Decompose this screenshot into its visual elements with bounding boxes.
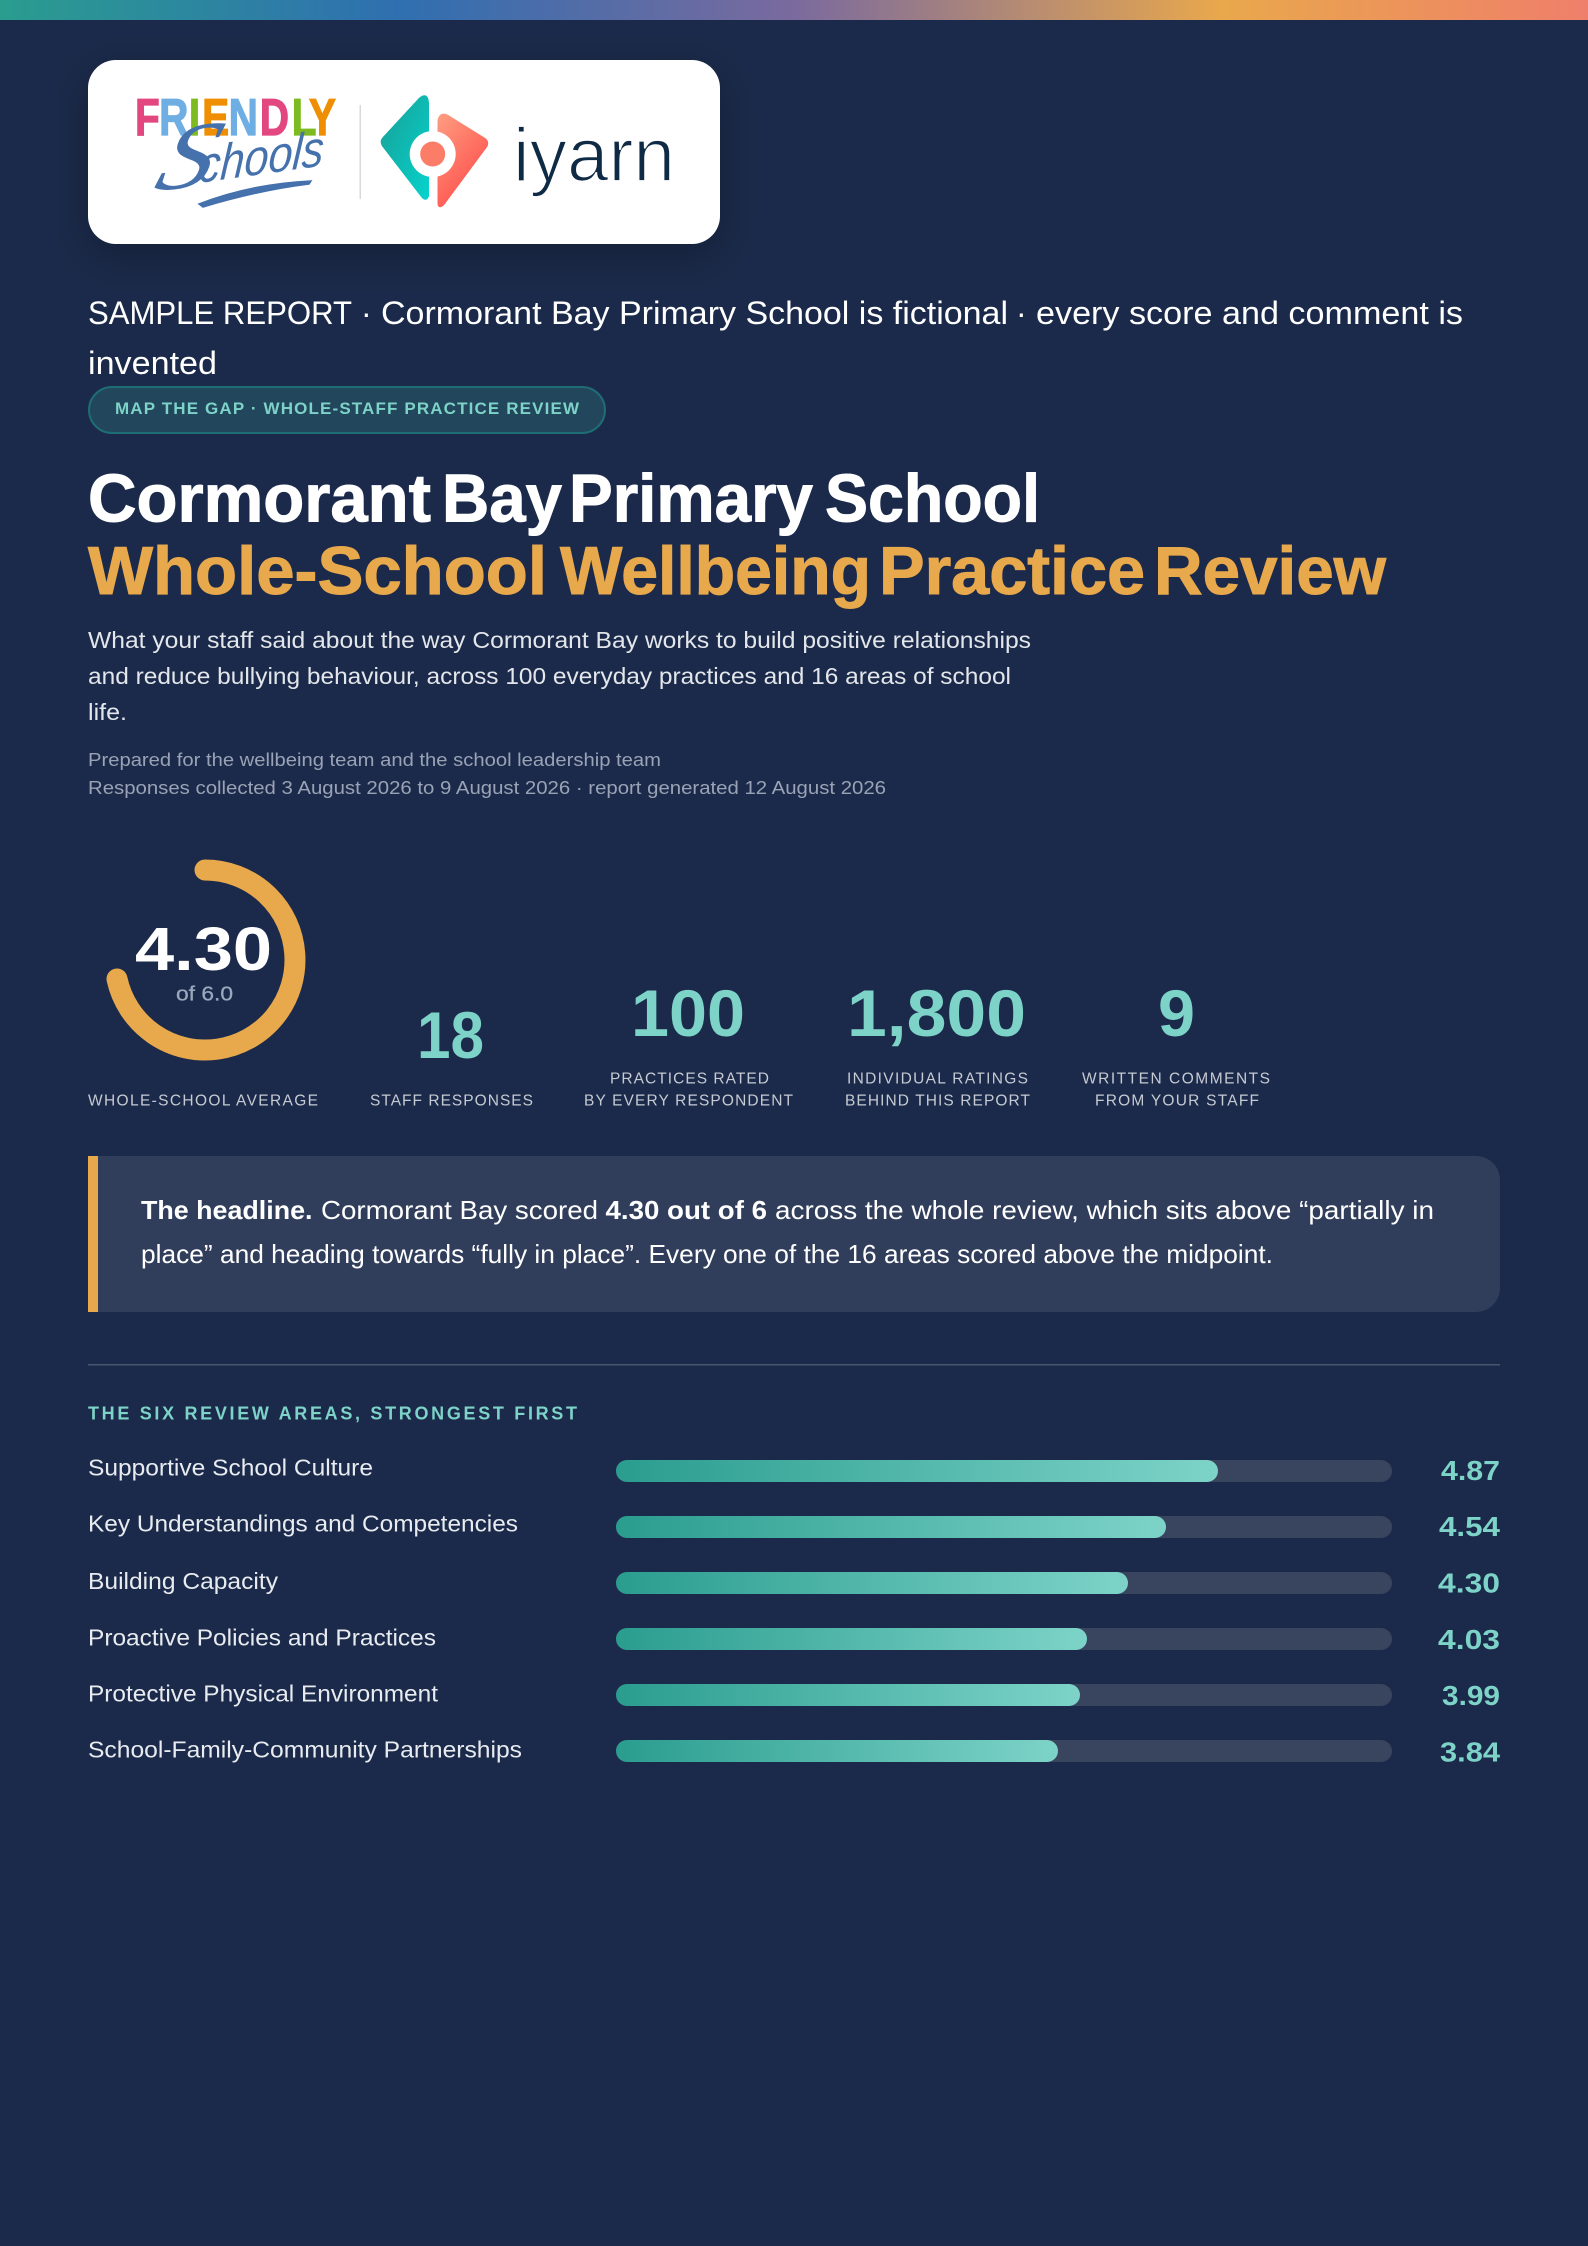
stat: individual ratings: 1,800 [847,976,1026,1050]
title line 1: Primary [569,460,813,536]
logo: iyarn [382,97,675,206]
row: Supportive School Culture: 4.87 [1441,1455,1500,1486]
row: School-Family-Community Partnerships: School-Family-Community Partnerships [88,1736,522,1762]
title [88,460,1387,609]
stat: individual ratings [845,976,1031,1110]
sample report notice: every score and comment is [1036,295,1463,331]
logo: Friendly Schools: chools [197,119,326,194]
row: Protective Physical Environment: 3.99 [1442,1680,1500,1711]
logo: Friendly Schools: I [189,88,200,146]
ring caption: of 6.0 [176,984,233,1006]
row: Key Understandings and Competencies: 4.54 [1439,1511,1501,1542]
row: Proactive Policies and Practices: 4.03 [1438,1624,1500,1655]
row: Building Capacity [88,1568,1500,1598]
title line 1: Bay [442,460,562,536]
intro paragraph: What your staff said about the way Cormorant Bay works to build positive relationships [88,627,1031,653]
callout text [141,1195,1434,1269]
logo: Friendly Schools: S [145,100,235,212]
stat: practices rated: 100 [631,976,745,1050]
callout text: 4.30 out of 6 [606,1195,767,1225]
title line 2: Practice [879,533,1145,609]
ring value: 4.30 [135,915,272,983]
logo: Friendly Schools: L [292,88,317,146]
sample report notice [88,295,1463,381]
sample report notice: invented [88,345,217,381]
prepared-for meta text: Responses collected 3 August 2026 to 9 August 2026 · report generated 12 August 2026 [88,777,886,798]
intro paragraph: life. [88,699,127,725]
bar chart: six review areas [88,1454,1501,1768]
stat: staff responses: 18 [417,998,484,1072]
logo: Friendly Schools: R [159,88,188,146]
stat label: WHOLE-SCHOOL AVERAGE [88,1092,318,1110]
callout: the headline [88,1156,1500,1312]
stat: written comments: WRITTEN COMMENTS [1082,1070,1270,1088]
stat: written comments: 9 [1158,976,1195,1050]
row: Protective Physical Environment: Protective Physical Environment [88,1680,439,1706]
pill: map the gap: MAP THE GAP · WHOLE-STAFF PRACTICE REVIEW [115,399,580,418]
row: School-Family-Community Partnerships [88,1736,1501,1768]
sample report notice: SAMPLE REPORT [88,295,352,331]
title line 2 [88,533,1387,609]
row: Key Understandings and Competencies: Key Understandings and Competencies [88,1510,518,1536]
logo: Friendly Schools: D [260,88,289,146]
stat: individual ratings: BEHIND THIS REPORT [845,1092,1031,1110]
intro paragraph [88,627,1031,725]
row: Protective Physical Environment [88,1680,1500,1711]
sample report notice: · [361,295,372,331]
sample report notice: · [1016,295,1027,331]
row: Supportive School Culture [88,1454,1500,1486]
stat: written comments [1082,976,1270,1110]
stat: practices rated [584,976,794,1110]
ring gauge [117,870,295,1050]
row: Proactive Policies and Practices [88,1624,1500,1655]
title line 1 [88,460,1040,536]
stat: staff responses [370,998,533,1110]
intro paragraph: and reduce bullying behaviour, across 100 everyday practices and 16 areas of school [88,663,1011,689]
row: Proactive Policies and Practices: Proactive Policies and Practices [88,1624,436,1650]
row: Building Capacity: Building Capacity [88,1568,279,1594]
logo: Friendly Schools: E [202,88,229,146]
stat: written comments: FROM YOUR STAFF [1095,1092,1259,1110]
callout text: across the whole review, which sits above “partially in [775,1195,1434,1225]
stat: practices rated: BY EVERY RESPONDENT [584,1092,794,1110]
pill: map the gap [89,387,605,433]
logo: Friendly Schools: Y [309,88,336,146]
stat: whole-school average ring [88,870,318,1110]
row: Key Understandings and Competencies [88,1510,1501,1542]
stat: staff responses: STAFF RESPONSES [370,1092,533,1110]
callout text: place” and heading towards “fully in place”. Every one of the 16 areas scored above the midpoint. [141,1239,1273,1269]
logo: Friendly Schools: F [135,88,160,146]
row: Supportive School Culture: Supportive School Culture [88,1454,373,1480]
title line 2: Wellbeing [560,533,871,609]
logo: Friendly Schools [135,88,336,212]
logo: iyarn: iyarn [513,113,675,198]
title line 1: Cormorant [88,460,431,536]
top gradient bar [0,0,1588,20]
section heading: THE SIX REVIEW AREAS, STRONGEST FIRST [88,1404,577,1424]
logo divider [360,105,361,199]
prepared-for meta text: Prepared for the wellbeing team and the school leadership team [88,749,661,770]
prepared-for meta text [88,749,886,798]
callout text: Cormorant Bay scored [321,1195,598,1225]
logo card [88,60,720,244]
stat: individual ratings: INDIVIDUAL RATINGS [847,1070,1028,1088]
title line 2: Review [1154,533,1387,609]
logo: Friendly Schools: N [229,88,258,146]
row: Building Capacity: 4.30 [1438,1568,1500,1598]
stat: practices rated: PRACTICES RATED [610,1070,769,1088]
sample report notice: Cormorant Bay Primary School is fictional [381,295,1008,331]
callout text: The headline. [141,1195,312,1225]
title line 2: Whole-School [88,533,547,609]
row: School-Family-Community Partnerships: 3.84 [1440,1736,1501,1768]
title line 1: School [825,460,1040,536]
